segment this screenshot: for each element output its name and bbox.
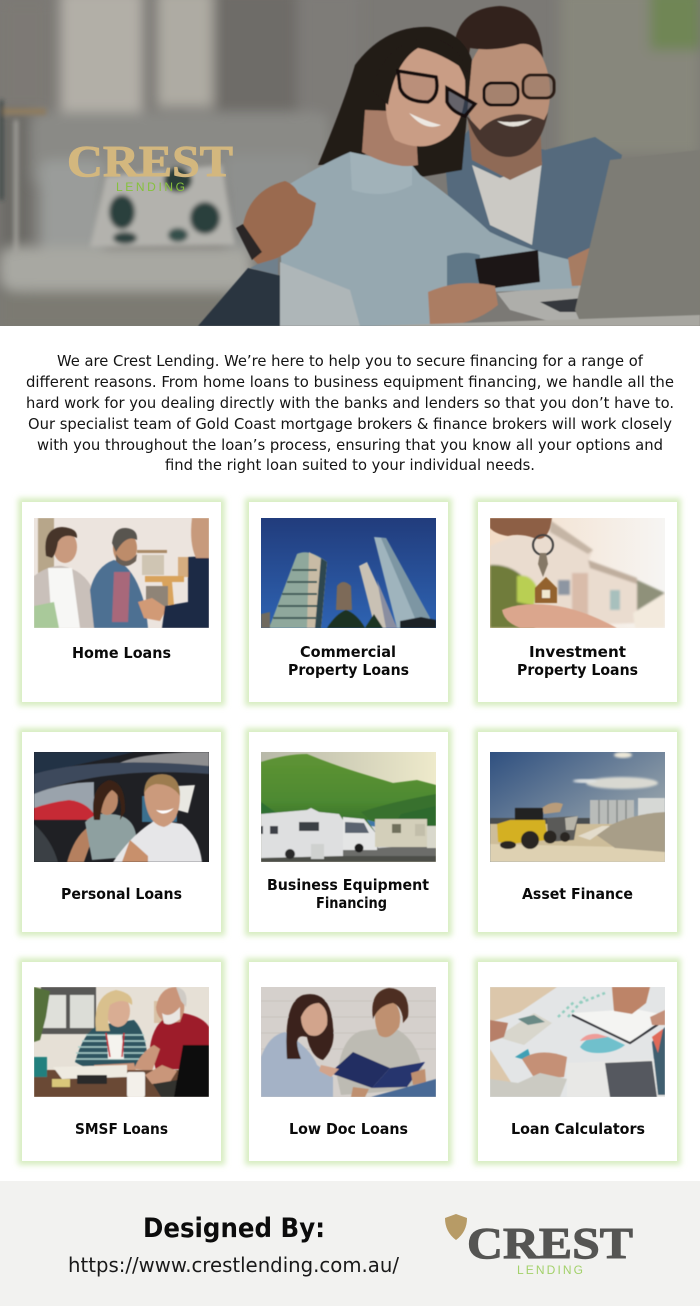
hand on shoulder: [243, 181, 316, 264]
footer logo: CREST: [467, 1219, 633, 1268]
photo: couple shaking hands: [34, 518, 209, 628]
card: Business Equipment Financing: Business Equipment: [267, 876, 430, 894]
footer heading: Designed By:: [143, 1213, 325, 1244]
intro paragraph: We are Crest Lending. We’re here to help you to secure financing for a range of: [57, 352, 644, 370]
man's shirt: [445, 128, 622, 280]
card: Loan Calculators: [474, 958, 681, 1165]
card: Business Equipment Financing: Financing: [316, 894, 387, 912]
card: Commercial Property Loans: Property Loans: [288, 661, 409, 679]
card: Investment Property Loans: Property Loans: [517, 661, 638, 679]
card: Investment Property Loans: Investment: [529, 643, 627, 661]
hero photo: couple at a laptop: [0, 0, 700, 326]
footer logo: LENDING: [517, 1263, 583, 1277]
pillow: [90, 165, 235, 247]
photo: quarry truck: [490, 752, 665, 862]
photo: couple reading a folder: [261, 987, 436, 1097]
woman's sweater: [280, 152, 585, 326]
photo: couple in a car: [34, 752, 209, 862]
footer logo: [445, 1214, 633, 1277]
photo: caravans and hills: [261, 752, 436, 862]
card: Home Loans: Home Loans: [72, 644, 171, 662]
intro paragraph: Our specialist team of Gold Coast mortgage brokers & finance brokers will work closely: [28, 415, 672, 433]
woman's hair: [318, 27, 472, 178]
card: Commercial Property Loans: [245, 498, 452, 706]
card: Business Equipment Financing: [245, 728, 452, 936]
intro paragraph: [26, 352, 674, 474]
card: Asset Finance: Asset Finance: [522, 885, 633, 903]
intro paragraph: with you throughout the loan’s process, ensuring that you know all your options and: [37, 436, 663, 454]
photo: house key handover: [490, 518, 665, 628]
card: Low Doc Loans: [245, 958, 452, 1165]
hero logo: LENDING: [116, 180, 185, 194]
intro paragraph: find the right loan suited to your individual needs.: [165, 456, 535, 474]
phone: [475, 250, 540, 290]
photo: older couple at table: [34, 987, 209, 1097]
man's glasses: [484, 83, 518, 105]
laptop base: [497, 284, 585, 326]
woman's neck and face: [362, 110, 418, 166]
card: Loan Calculators: Loan Calculators: [511, 1120, 645, 1138]
footer URL: https://www.crestlending.com.au/: [68, 1253, 399, 1277]
hero logo: CREST: [67, 137, 233, 186]
jeans: [198, 268, 282, 326]
laptop screen: [575, 150, 700, 326]
footer band: [0, 1181, 700, 1306]
card: SMSF Loans: SMSF Loans: [75, 1120, 168, 1138]
photo: gold coast towers: [261, 518, 436, 628]
card: SMSF Loans: [18, 958, 225, 1165]
intro paragraph: different reasons. From home loans to business equipment financing, we handle all the: [26, 373, 674, 391]
hand holding phone: [428, 283, 498, 326]
card: Commercial Property Loans: Commercial: [300, 643, 396, 661]
card: Personal Loans: [18, 728, 225, 936]
card: Low Doc Loans: Low Doc Loans: [289, 1120, 408, 1138]
card: Asset Finance: [474, 728, 681, 936]
icon: shield: [445, 1214, 467, 1240]
photo: calculator and charts on desk: [490, 987, 665, 1097]
man's neck and face: [468, 120, 542, 180]
card: Home Loans: [18, 498, 225, 706]
woman's glasses: [398, 71, 437, 102]
card: Personal Loans: Personal Loans: [61, 885, 182, 903]
card: Investment Property Loans: [474, 498, 681, 706]
intro paragraph: hard work for you dealing directly with the banks and lenders so that you don’t have to.: [26, 394, 674, 412]
